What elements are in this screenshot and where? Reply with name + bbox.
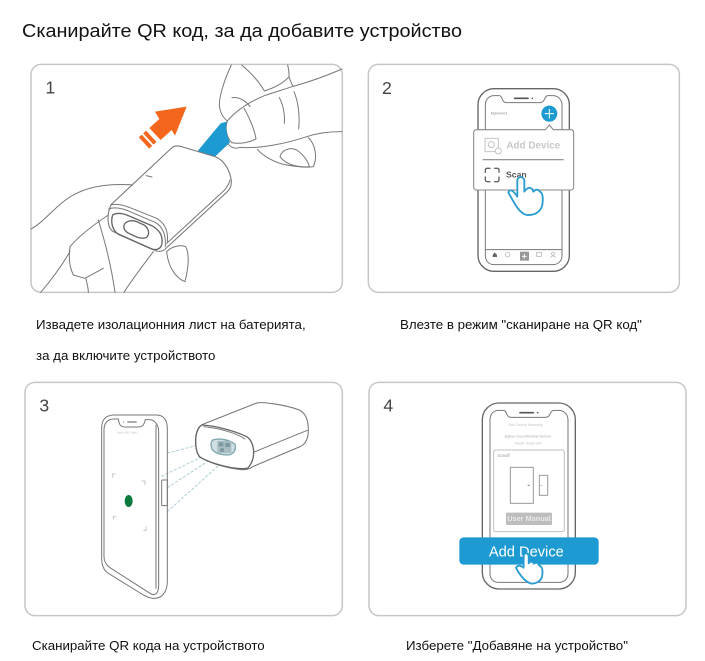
caption: step 1: Извадете изолационния лист на батерията, <box>36 317 306 332</box>
icon: tapping hand <box>516 553 542 584</box>
panel: step 1 <box>31 64 342 292</box>
phone <box>482 403 575 589</box>
icon: tapping hand <box>508 177 543 215</box>
icon: lower hand holding the device <box>31 184 188 292</box>
caption: step 1 second line: за да включите устройството <box>36 348 215 363</box>
panel: step 2 <box>368 64 679 292</box>
popup menu <box>474 125 574 190</box>
device card: User Manual <box>507 514 551 523</box>
green dot <box>125 495 133 507</box>
phone <box>478 89 569 271</box>
step number 1: 1 <box>45 77 55 97</box>
Add Device button: Add Device <box>489 545 564 561</box>
icon: orange arrow <box>140 107 187 147</box>
device card: Sonoff <box>497 453 511 458</box>
tab bar <box>493 252 555 261</box>
phone: Model: SNZB-04P <box>515 442 543 446</box>
step number 3: 3 <box>39 396 49 416</box>
panel: step 4 <box>369 382 686 616</box>
phone: Add Device Manually <box>508 423 543 427</box>
popup menu: Add Device <box>506 140 561 151</box>
caption: step 4: Изберете "Добавяне на устройство" <box>406 638 628 653</box>
caption: step 2: Влезте в режим "сканиране на QR код" <box>400 317 642 332</box>
step number 4: 4 <box>383 396 393 416</box>
scanner corners <box>113 474 146 530</box>
title: Сканирайте QR код, за да добавите устройство <box>22 20 462 41</box>
phone: Zigbee Door/Window Sensor <box>504 435 552 439</box>
device front view <box>196 403 308 470</box>
phone side view <box>102 415 167 598</box>
step number 2: 2 <box>382 78 392 98</box>
phone side view: Scan QR Code <box>117 430 137 434</box>
icon: upper hand pulling the sheet <box>219 65 342 167</box>
phone: MyHome3 <box>491 112 507 116</box>
blue insulating sheet <box>198 122 230 157</box>
device body <box>108 146 231 251</box>
panel: step 3 <box>25 382 342 616</box>
popup menu: Scan <box>506 170 527 180</box>
caption: step 3: Сканирайте QR кода на устройството <box>32 638 265 653</box>
scan beams <box>161 442 228 512</box>
plus button <box>541 106 557 122</box>
Add Device button <box>459 537 599 565</box>
device card <box>494 450 564 532</box>
